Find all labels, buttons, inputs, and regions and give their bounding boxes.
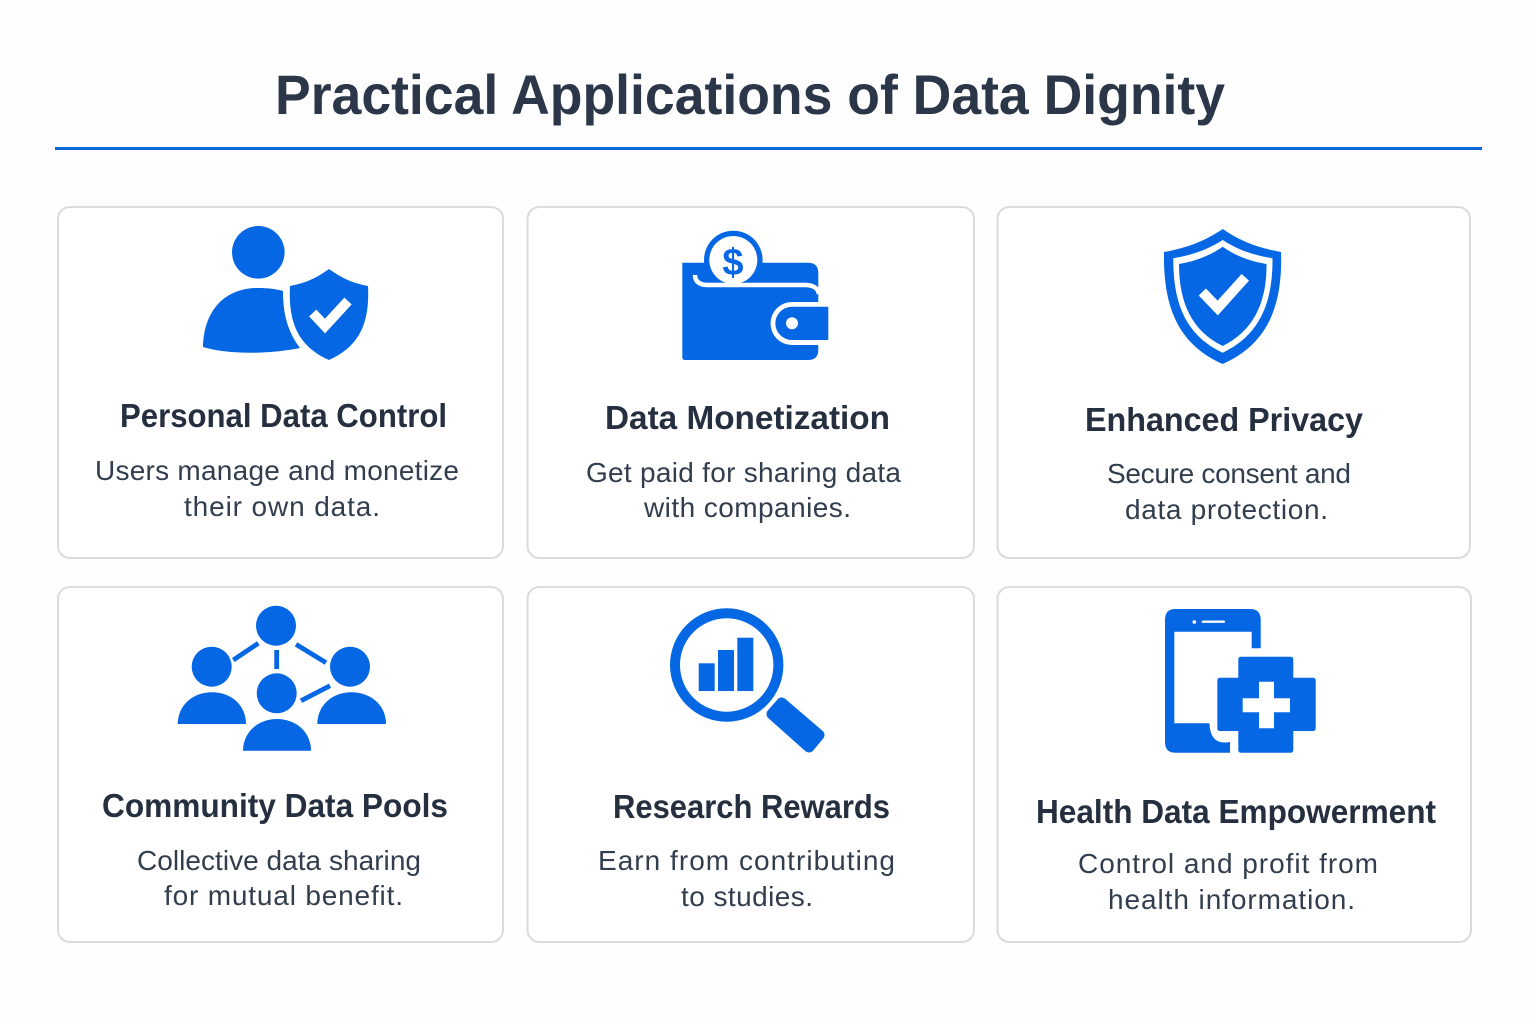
description bbox=[1078, 848, 1378, 915]
heading: Data Monetization bbox=[605, 399, 890, 436]
icon: magnifier with bars bbox=[675, 613, 819, 747]
panel: research rewards bbox=[528, 587, 974, 942]
description: Control and profit from bbox=[1078, 848, 1378, 879]
panel: health data empowerment bbox=[998, 587, 1471, 942]
description: to studies. bbox=[681, 881, 813, 912]
icon: phone with medical cross bbox=[1165, 609, 1316, 753]
heading: Community Data Pools bbox=[102, 787, 448, 824]
description bbox=[598, 845, 895, 912]
icon: connected people bbox=[178, 606, 386, 751]
heading: Personal Data Control bbox=[120, 397, 447, 434]
heading: Health Data Empowerment bbox=[1036, 793, 1436, 830]
title: Practical Applications of Data Dignity bbox=[275, 63, 1225, 126]
icon: wallet with coin: $ bbox=[722, 242, 744, 284]
description: health information. bbox=[1108, 884, 1355, 915]
description: Users manage and monetize bbox=[95, 455, 459, 486]
icon: shield with check bbox=[1164, 229, 1281, 364]
description: Secure consent and bbox=[1107, 458, 1351, 489]
description: Get paid for sharing data bbox=[586, 457, 901, 488]
description: data protection. bbox=[1125, 494, 1328, 525]
panel: personal data control bbox=[58, 207, 503, 558]
panel: community data pools bbox=[58, 587, 503, 942]
description bbox=[95, 455, 459, 522]
heading: Enhanced Privacy bbox=[1085, 401, 1364, 438]
panel: data monetization bbox=[528, 207, 974, 558]
heading: Research Rewards bbox=[613, 788, 890, 825]
icon: person with shield bbox=[203, 226, 368, 360]
description: their own data. bbox=[184, 491, 380, 522]
description: for mutual benefit. bbox=[164, 880, 403, 911]
icon: wallet with coin bbox=[682, 231, 830, 360]
panel: enhanced privacy bbox=[998, 207, 1470, 558]
description bbox=[586, 457, 901, 523]
description: Collective data sharing bbox=[137, 845, 421, 876]
description: Earn from contributing bbox=[598, 845, 895, 876]
description bbox=[137, 845, 421, 911]
description bbox=[1107, 458, 1351, 525]
description: with companies. bbox=[643, 492, 851, 523]
